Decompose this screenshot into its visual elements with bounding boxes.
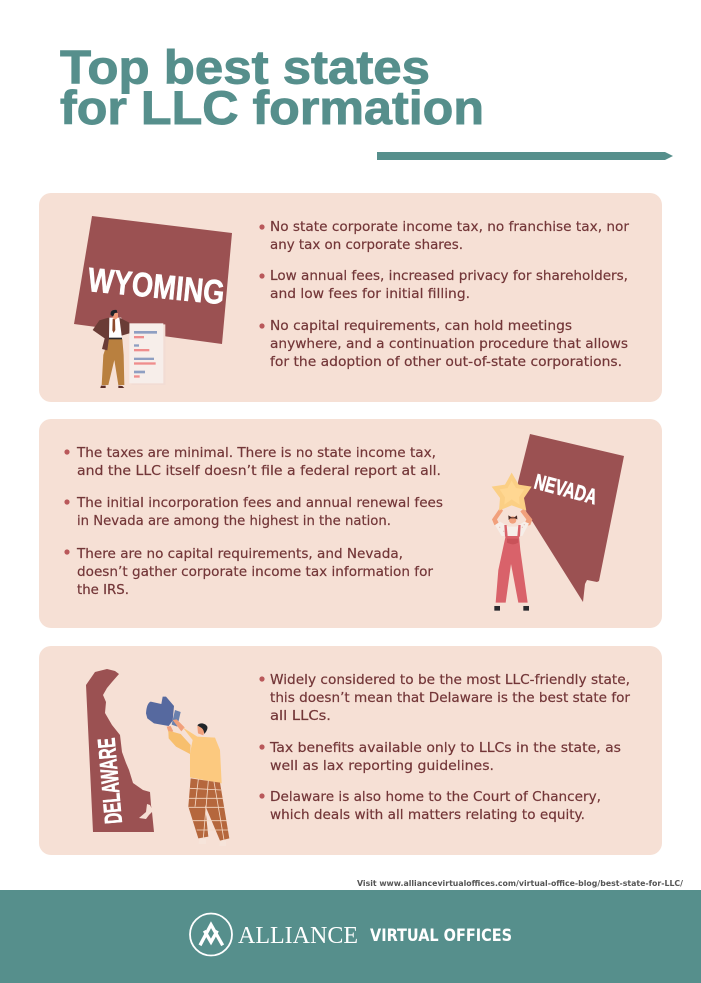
text: Wyoming bullets: anywhere, and a continuation procedure that allows — [270, 337, 628, 352]
text: Delaware bullets: all LLCs. — [270, 709, 331, 724]
text: Nevada bullets: doesn’t gather corporate income tax information for — [77, 565, 434, 580]
text: Nevada bullets: The taxes are minimal. There is no state income tax, — [76, 446, 436, 461]
label: DELAWARE: DELAWARE — [94, 737, 128, 825]
text: Wyoming bullets: and low fees for initial filling. — [270, 287, 470, 302]
title: Top best states — [60, 40, 430, 94]
text: Nevada bullets: in Nevada are among the highest in the nation. — [77, 514, 391, 529]
text: Delaware bullets: this doesn’t mean that Delaware is the best state for — [270, 691, 631, 706]
bay detail — [139, 804, 153, 819]
text: Wyoming bullets: No state corporate income tax, no franchise tax, nor — [270, 220, 630, 235]
title: for LLC formation — [60, 81, 484, 134]
footer band — [0, 890, 701, 983]
text: Wyoming bullets: Low annual fees, increased privacy for shareholders, — [270, 269, 628, 284]
icon: Alliance logo — [190, 914, 232, 956]
text: Nevada bullets: the IRS. — [77, 583, 129, 598]
panel: Delaware — [39, 646, 662, 855]
label: WYOMING: WYOMING — [86, 261, 226, 312]
text: Delaware bullets: Widely considered to be the most LLC-friendly state, — [270, 673, 630, 688]
map: Delaware state — [86, 669, 154, 832]
panel: Nevada — [39, 419, 662, 628]
wordmark: VIRTUAL OFFICES: VIRTUAL OFFICES — [370, 926, 512, 945]
text: Wyoming bullets — [259, 220, 630, 370]
text: Nevada bullets — [64, 446, 443, 598]
illustration: businessman with report — [93, 310, 165, 388]
text: Delaware bullets: Tax benefits available only to LLCs in the state, as — [269, 741, 621, 756]
text: Delaware bullets: which deals with all matters relating to equity. — [270, 808, 585, 823]
text: Wyoming bullets: No capital requirements, can hold meetings — [270, 319, 572, 334]
arrow: title underline — [377, 152, 673, 160]
text: Nevada bullets: and the LLC itself doesn’t file a federal report at all. — [77, 464, 441, 479]
text: Nevada bullets: The initial incorporation fees and annual renewal fees — [76, 496, 443, 511]
text: Wyoming bullets: for the adoption of other out-of-state corporations. — [270, 355, 622, 370]
title — [60, 40, 484, 134]
text: Wyoming bullets: any tax on corporate shares. — [270, 238, 463, 253]
text: Delaware bullets — [259, 673, 631, 823]
label: NEVADA: NEVADA — [532, 470, 600, 509]
map: Nevada state — [517, 434, 624, 602]
illustration: man with thumbs up — [146, 697, 229, 846]
source link: Visit www.alliancevirtualoffices.com/virtual-office-blog/best-state-for-LLC/ — [357, 879, 683, 888]
text: Delaware bullets: well as lax reporting guidelines. — [270, 759, 494, 774]
wordmark: ALLIANCE: ALLIANCE — [238, 923, 358, 949]
illustration: woman holding star — [492, 473, 532, 611]
text: Nevada bullets: There are no capital requirements, and Nevada, — [76, 547, 403, 562]
text: Delaware bullets: Delaware is also home to the Court of Chancery, — [270, 790, 601, 805]
panel: Wyoming — [39, 193, 662, 402]
map: Wyoming state — [74, 216, 232, 344]
